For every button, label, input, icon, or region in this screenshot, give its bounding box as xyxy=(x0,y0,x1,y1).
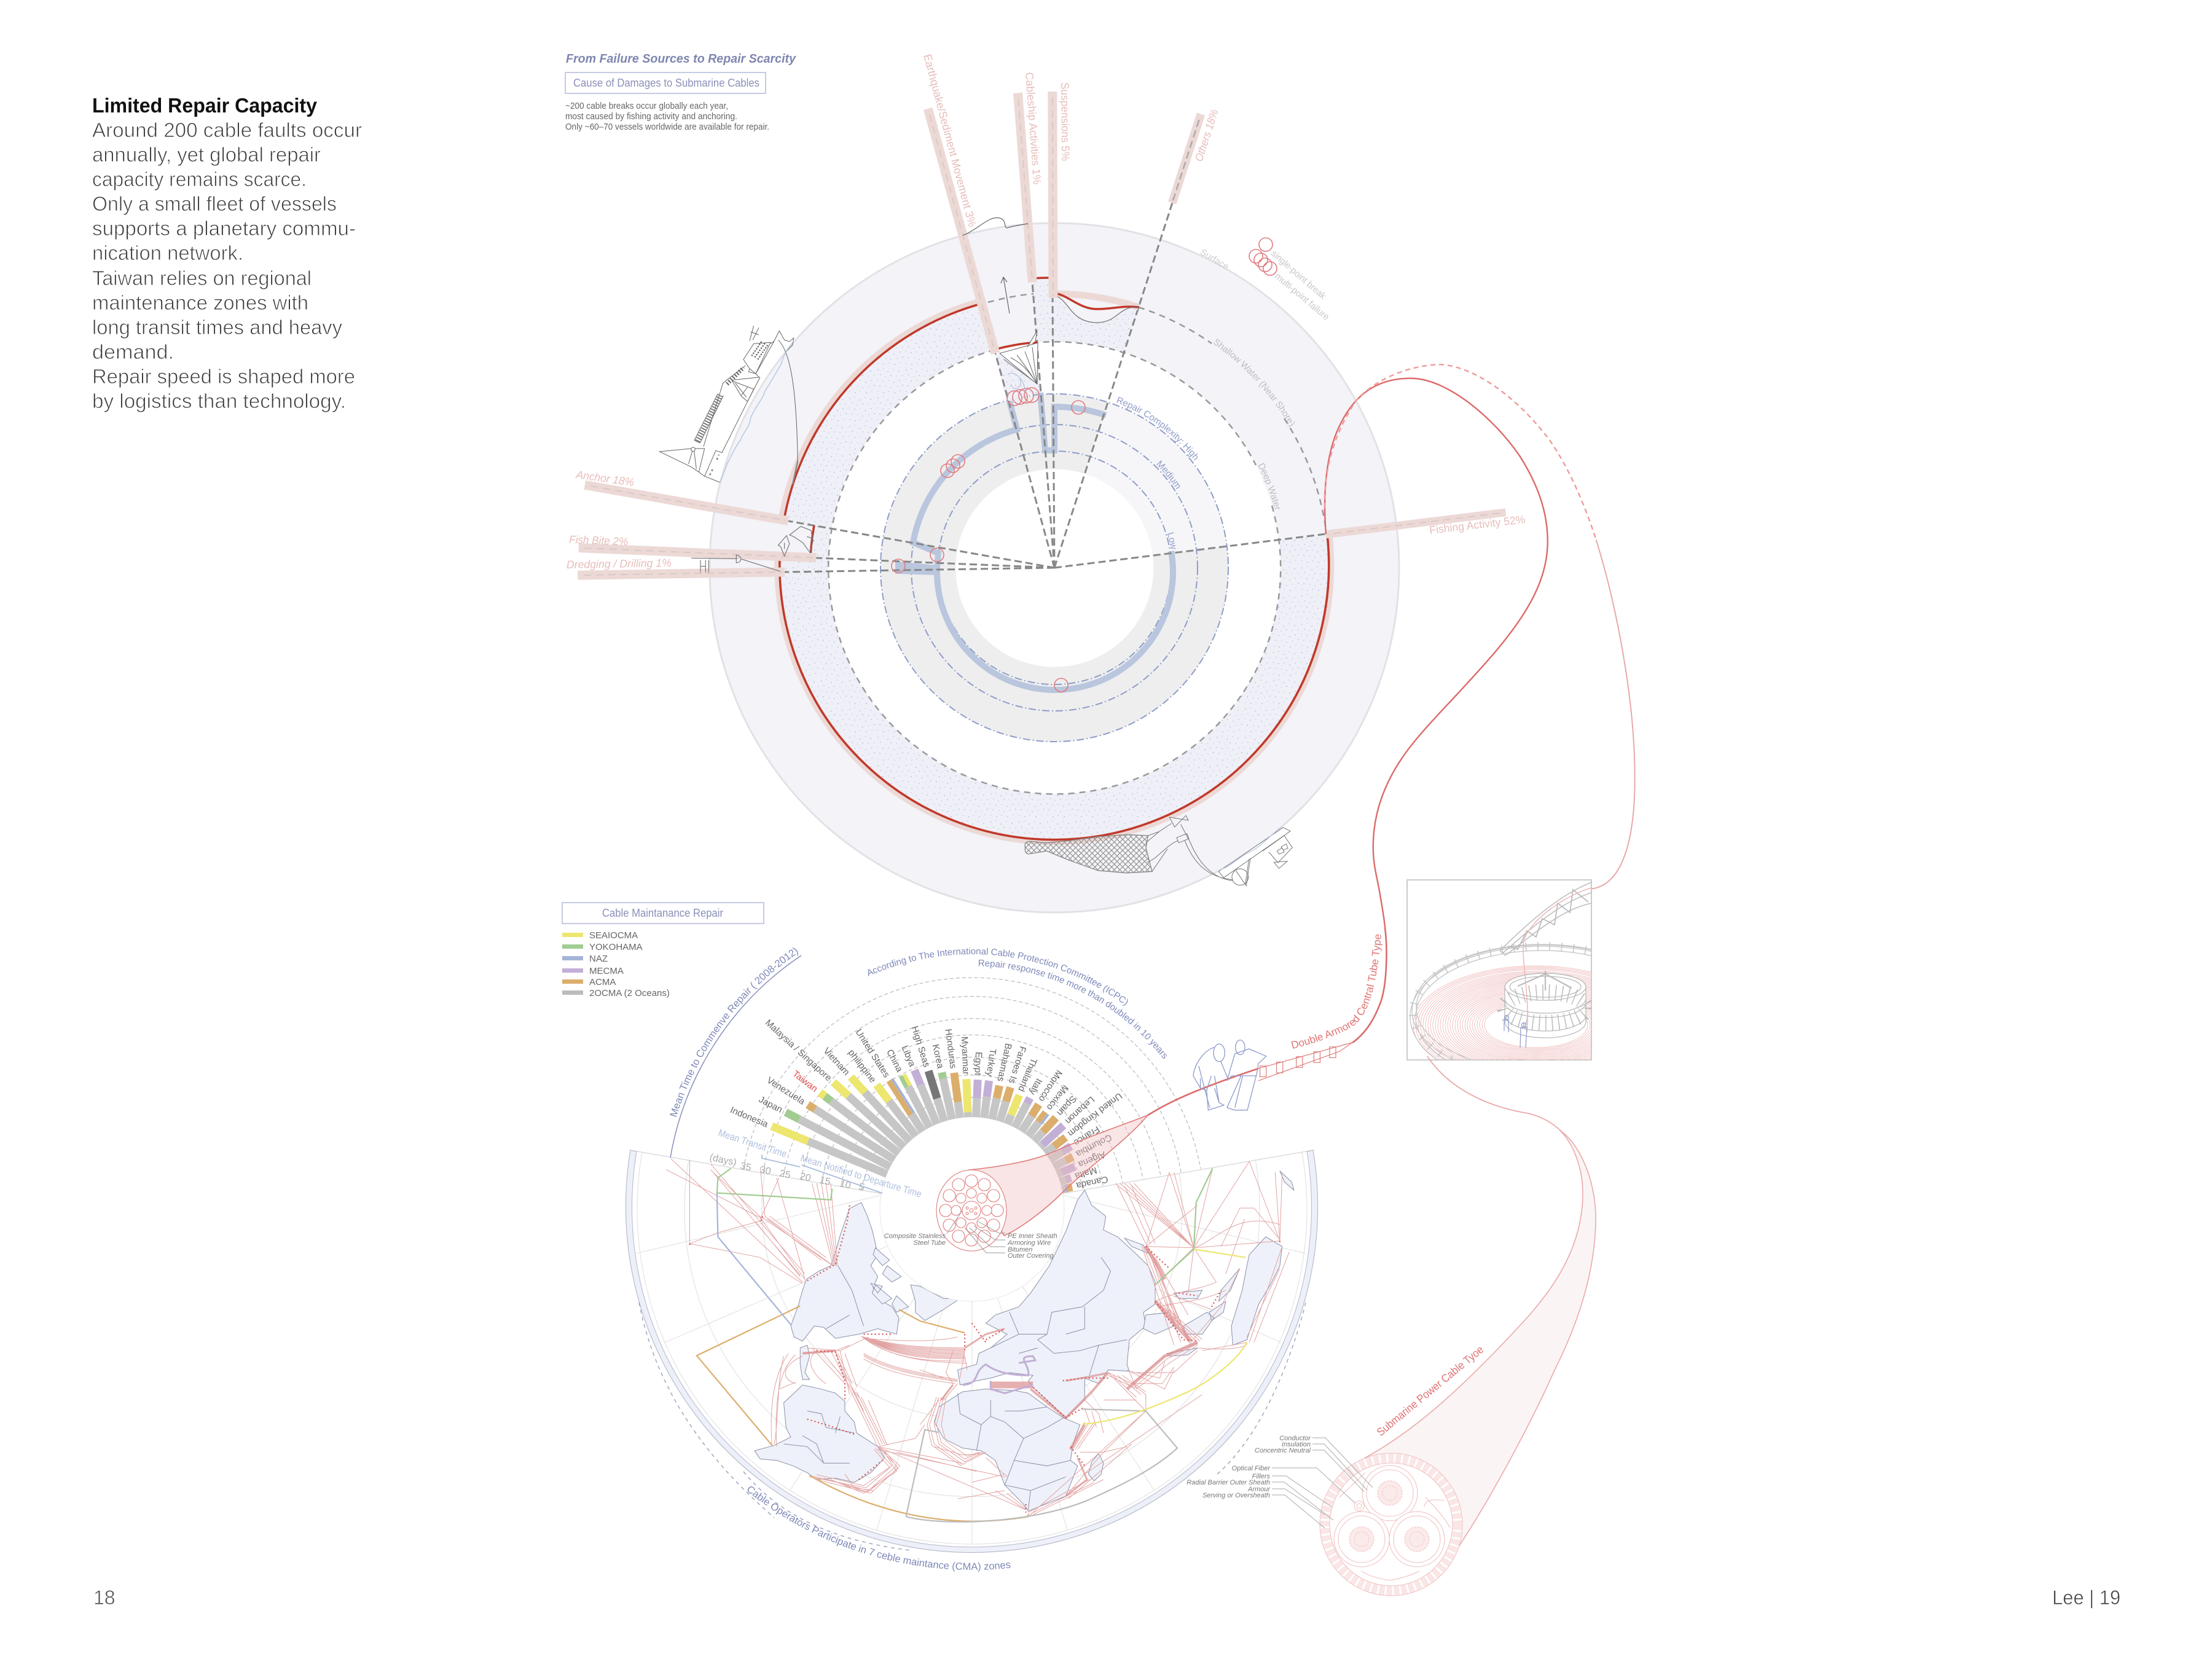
heading: Limited Repair Capacity xyxy=(92,94,318,117)
arc subtitle: response time: Repair response time more than doubled in 10 years xyxy=(978,960,1167,1059)
eurasia xyxy=(958,1190,1155,1418)
ring labels: Deep Water xyxy=(1258,463,1280,509)
bar: High Seas: High Seas xyxy=(909,1025,932,1069)
bar: United States xyxy=(853,1027,927,1134)
transit brackets xyxy=(762,1155,882,1193)
cross section labels: Armoring Wire xyxy=(1007,1239,1051,1247)
panel: world map of cables xyxy=(626,1150,1317,1553)
ring labels: Shallow Water (Near Shore) xyxy=(1214,339,1295,426)
bar: Malaysia / Singapore: Malaysia / Singapore xyxy=(763,1018,834,1083)
cable from box to power cable fan xyxy=(1427,1056,1564,1134)
spoke: fishing activity xyxy=(1325,508,1506,538)
bar: Mexico: Mexico xyxy=(1045,1083,1070,1112)
south america xyxy=(755,1385,885,1482)
madagascar xyxy=(1088,1454,1104,1481)
bar: Mexico xyxy=(1024,1083,1070,1139)
ring labels: Surface xyxy=(1198,247,1231,272)
day arcs xyxy=(743,978,1201,1190)
sediment wedge stipple xyxy=(995,343,1040,401)
bar: Spain: Spain xyxy=(1055,1094,1078,1118)
bar: Italy xyxy=(1010,1077,1044,1130)
bar: France xyxy=(1047,1124,1102,1164)
spoke labels: Earthquake/Sediment Movement 3% xyxy=(921,53,979,228)
body copy: by logistics than technology. xyxy=(92,390,346,412)
bar: Venezuela: Venezuela xyxy=(765,1075,807,1107)
cross section xyxy=(936,1170,1006,1251)
page number left: 18 xyxy=(93,1586,116,1609)
spoke: dredging xyxy=(578,567,785,580)
body copy: demand. xyxy=(92,340,174,363)
note text xyxy=(565,101,769,132)
greenland xyxy=(911,1285,960,1320)
convergence dashed lines xyxy=(785,203,1326,572)
cross section labels: Outer Covering xyxy=(1008,1252,1054,1260)
repair complexity labels: Low xyxy=(1167,532,1176,549)
bar: Indonesia xyxy=(729,1105,888,1179)
bar: Spain xyxy=(1030,1094,1078,1145)
cross section labels xyxy=(884,1210,1057,1260)
cross section labels: Composite Stainless xyxy=(884,1233,946,1240)
bar: Vietnam xyxy=(821,1046,914,1145)
bar: Faroes Is: Faroes Is xyxy=(1006,1045,1028,1084)
shallow water dashed arcs xyxy=(988,294,1327,535)
panel: equipment drawing xyxy=(1406,879,1592,1061)
repair complexity labels: Medium xyxy=(1156,460,1180,489)
text block: limited repair capacity xyxy=(92,94,362,412)
notch for fish bite xyxy=(780,520,814,557)
label: double armored: Double Armored Central Tube Type xyxy=(1292,934,1382,1049)
pale cable to equipment box xyxy=(1591,539,1635,889)
australia xyxy=(1231,1237,1282,1345)
label box: cause of damages xyxy=(565,73,766,93)
body copy: Repair speed is shaped more xyxy=(92,365,355,388)
southeast asia islands xyxy=(1124,1171,1294,1356)
power cable cross section xyxy=(1320,1453,1462,1596)
panel: armored cable section xyxy=(884,1040,1352,1260)
heading box: cable maintenance repair xyxy=(562,903,764,924)
bar: Thailand xyxy=(1002,1056,1039,1126)
bar: Turkey xyxy=(979,1048,998,1118)
legend: CMA zones: MECMA xyxy=(589,966,624,976)
bar: Egypt xyxy=(971,1051,984,1117)
spoke: earthquake xyxy=(924,108,1000,355)
bar: Malaysia / Singapore xyxy=(763,1018,908,1151)
cable from section to workers xyxy=(1148,1069,1258,1115)
legend: break types: single-point break xyxy=(1269,248,1328,302)
bar: philippine: philippine xyxy=(846,1048,878,1085)
spoke labels: Fishing Activity 52% xyxy=(1429,513,1526,536)
pink halo on cable xyxy=(778,294,1331,842)
africa xyxy=(934,1389,1080,1511)
spoke: cableship xyxy=(1013,93,1037,283)
spoke: suspensions xyxy=(1048,92,1057,298)
icon: fish and shark xyxy=(779,527,813,556)
repair complexity labels xyxy=(1116,397,1198,549)
power cable labels: Radial Barrier Outer Sheath xyxy=(1186,1479,1270,1486)
grid xyxy=(636,1152,1307,1544)
cross section labels: Steel Tube xyxy=(914,1239,946,1247)
dense cable bundles xyxy=(802,1247,1198,1496)
bar: United Kingdom xyxy=(1042,1091,1124,1157)
bar: Italy: Italy xyxy=(1027,1077,1044,1097)
bar: Algeria: Algeria xyxy=(1077,1149,1107,1170)
stippled shallow band xyxy=(780,304,1328,842)
bar: Korea: Korea xyxy=(930,1043,946,1070)
spoke labels: Suspensions 5% xyxy=(1059,82,1072,161)
bar: High Seas xyxy=(909,1025,949,1123)
break markers xyxy=(892,388,1085,692)
cable jacket and workers xyxy=(1193,1040,1352,1110)
seabed wave line xyxy=(1053,295,1139,323)
cable cone xyxy=(969,1115,1148,1236)
outer band xyxy=(626,1150,1317,1553)
spoke: fish bite xyxy=(578,543,817,562)
body copy: maintenance zones with xyxy=(92,291,308,314)
spoke labels: Anchor 18% xyxy=(575,468,635,488)
arctic islands xyxy=(871,1248,908,1312)
bar: philippine xyxy=(846,1048,920,1139)
day scale labels: 35 xyxy=(739,1161,752,1174)
body copy: nication network. xyxy=(92,241,243,264)
label box: cause of damages: Cause of Damages to Submarine Cables xyxy=(573,77,759,89)
cable routes xyxy=(666,1159,1289,1516)
white chart hole xyxy=(880,1117,1064,1301)
icon: trawl net xyxy=(1025,815,1292,886)
bar: Libya xyxy=(900,1044,941,1126)
bar: United Kingdom: United Kingdom xyxy=(1065,1091,1124,1139)
icon: dredging rig xyxy=(691,555,780,573)
north america xyxy=(791,1202,899,1341)
railing xyxy=(1409,942,1591,1060)
CMA zone outlines xyxy=(697,1168,1247,1522)
bar: Libya: Libya xyxy=(900,1044,917,1069)
armored cable segment xyxy=(1258,1043,1352,1081)
worker left xyxy=(1193,1044,1228,1110)
optical fiber core xyxy=(1354,1501,1364,1511)
day scale labels: (days) xyxy=(708,1152,737,1168)
power cable fan xyxy=(1365,1130,1596,1556)
core cable right xyxy=(1389,1512,1445,1567)
deep water dashed ring xyxy=(828,342,1281,794)
icon: cable ship xyxy=(659,326,798,484)
bar: Venezuela xyxy=(765,1075,897,1164)
small workers xyxy=(1502,1015,1527,1048)
legend: CMA zones: NAZ xyxy=(589,954,608,964)
bar: Bahamas xyxy=(987,1042,1014,1120)
note text: ~200 cable breaks occur globally each year, xyxy=(565,101,728,111)
bar: Bahamas: Bahamas xyxy=(995,1042,1014,1083)
dashed cable curve xyxy=(1325,364,1596,539)
body copy: capacity remains scarce. xyxy=(92,168,307,190)
legend: CMA zones: YOKOHAMA xyxy=(589,942,643,952)
red cable ring xyxy=(780,278,1329,840)
arch truss xyxy=(1500,882,1591,1032)
cross section labels: PE Inner Sheath xyxy=(1008,1233,1057,1240)
central drum xyxy=(1505,971,1586,1038)
bar: Korea xyxy=(930,1043,957,1121)
coastline speckle on outer ring xyxy=(639,1303,1306,1550)
day scale labels: 20 xyxy=(799,1171,812,1184)
bar: Columbia xyxy=(1051,1132,1113,1171)
bar: Egypt: Egypt xyxy=(972,1051,984,1076)
landmasses xyxy=(666,1159,1294,1522)
bar: Malta: Malta xyxy=(1073,1164,1098,1182)
legend: CMA zones: 2OCMA (2 Oceans) xyxy=(589,988,670,998)
icon: upward arrow xyxy=(1001,277,1010,313)
spoke: anchor xyxy=(584,480,789,525)
bar: France: France xyxy=(1072,1124,1102,1148)
power cable labels xyxy=(1186,1435,1373,1528)
power cable labels: Concentric Neutral xyxy=(1255,1447,1311,1454)
legend: CMA zones: ACMA xyxy=(589,977,616,987)
worker right xyxy=(1227,1040,1266,1110)
spoke labels: Cableship Activities 1% xyxy=(1023,72,1043,185)
spoke labels: Fish Bite 2% xyxy=(569,533,628,547)
heading box: cable maintenance repair: Cable Maintanance Repair xyxy=(602,907,723,919)
day scale labels: 30 xyxy=(759,1164,772,1177)
bar: Taiwan xyxy=(790,1069,902,1158)
bar: China: China xyxy=(884,1048,905,1074)
day scale labels: 10 xyxy=(839,1179,852,1191)
bar: Turkey: Turkey xyxy=(984,1048,998,1077)
arc title: mean time: Mean Time to Commenve Repair ( 2008-2012) xyxy=(670,947,798,1117)
map sector background xyxy=(626,1150,1317,1553)
bar: Thailand: Thailand xyxy=(1016,1056,1039,1093)
day scale labels: 15 xyxy=(818,1175,831,1188)
spoke labels xyxy=(567,53,1526,571)
body copy xyxy=(92,119,362,412)
repair complexity rings xyxy=(880,394,1228,742)
ring labels xyxy=(1198,247,1295,509)
bar: Malta xyxy=(1058,1164,1098,1186)
bar: Honduras xyxy=(943,1028,965,1118)
label: mean transit time: Mean Transit Time xyxy=(717,1128,788,1160)
body copy: Only a small fleet of vessels xyxy=(92,192,337,215)
legend: break types xyxy=(1249,238,1332,323)
bar: Lebanon xyxy=(1037,1094,1097,1151)
legend: CMA zones xyxy=(562,930,670,998)
repair complexity labels: Repair Complexity: High xyxy=(1116,397,1198,461)
solid cable curve xyxy=(1325,378,1548,928)
spoke labels: Dredging / Drilling 1% xyxy=(567,557,672,571)
cable landing points xyxy=(689,1206,1280,1513)
country bars xyxy=(729,1018,1124,1194)
day scale labels xyxy=(708,1152,866,1193)
central america xyxy=(800,1345,810,1379)
red cable: lower run xyxy=(1352,928,1386,1043)
bar: Canada xyxy=(1061,1174,1109,1194)
arc title: ICPC: According to The International Cable Protection Committee (ICPC) xyxy=(868,947,1128,1006)
day scale labels: 5 xyxy=(858,1182,866,1193)
spoke labels: Others 18% xyxy=(1193,108,1221,163)
body copy: Around 200 cable faults occur xyxy=(92,119,362,141)
note text: most caused by fishing activity and anchoring. xyxy=(565,111,737,122)
panel: ocean depth ring diagram xyxy=(567,53,1551,938)
bar: Canada: Canada xyxy=(1075,1174,1109,1191)
label: submarine power cable: Submarine Power Cable Tyoe xyxy=(1375,1343,1486,1438)
bar: Myanmar xyxy=(959,1036,973,1118)
power cable labels: Serving or Oversheath xyxy=(1202,1492,1270,1499)
legend: break types: multi-point failure xyxy=(1273,271,1332,323)
bar: Faroes Is xyxy=(995,1045,1028,1123)
power cable labels: Fillers xyxy=(1252,1473,1270,1480)
page number right: Lee | 19 xyxy=(2052,1586,2120,1609)
icon: seabed hill line xyxy=(963,218,1028,235)
bar: Algeria xyxy=(1055,1149,1107,1179)
core cable left xyxy=(1334,1512,1389,1567)
legend: CMA zones: SEAIOCMA xyxy=(589,930,638,941)
outer surface disc xyxy=(710,223,1399,912)
power cable labels: Conductor xyxy=(1279,1435,1311,1442)
bar: Japan xyxy=(757,1094,893,1172)
country borders xyxy=(784,1257,1127,1510)
bar: Taiwan: Taiwan xyxy=(790,1069,820,1094)
icon: sediment wedge drawing xyxy=(1000,331,1038,393)
deep water white disc xyxy=(828,342,1281,794)
note text: Only ~60–70 vessels worldwide are available for repair. xyxy=(565,122,769,132)
bar: Myanmar: Myanmar xyxy=(959,1036,971,1075)
body copy: Taiwan relies on regional xyxy=(92,267,312,289)
panel: radial bar chart of repair time xyxy=(670,947,1225,1572)
core cable top xyxy=(1362,1465,1418,1521)
body copy: long transit times and heavy xyxy=(92,316,342,339)
bar: Japan: Japan xyxy=(757,1094,784,1115)
bar: Morocco xyxy=(1017,1068,1064,1134)
coils of cable xyxy=(1413,966,1591,1060)
bar: Morocco: Morocco xyxy=(1037,1068,1064,1104)
repair path xyxy=(898,393,1173,690)
bar: Indonesia: Indonesia xyxy=(729,1105,770,1130)
body copy: annually, yet global repair xyxy=(92,143,321,166)
mean time arc xyxy=(670,955,801,1158)
red cable: solid loop xyxy=(1325,364,1635,928)
bar: Vietnam: Vietnam xyxy=(821,1046,852,1078)
bar: Columbia: Columbia xyxy=(1074,1132,1113,1159)
power cable labels: Optical Fiber xyxy=(1232,1465,1271,1472)
label: mean notified: Mean Notified to Departure Time xyxy=(799,1153,923,1200)
bar: United States: United States xyxy=(853,1027,892,1080)
cross section labels: Bitumen xyxy=(1008,1246,1032,1253)
power cable labels: Armour xyxy=(1247,1486,1271,1493)
heading: from failure sources: From Failure Sources to Repair Scarcity xyxy=(566,52,796,66)
power cable labels: Insulation xyxy=(1282,1441,1311,1448)
day scale labels: 25 xyxy=(779,1168,791,1181)
bar: Lebanon: Lebanon xyxy=(1063,1094,1097,1126)
arc title: CMA zones: Cable Operators Participate in 7 ceble maintance (CMA) zones xyxy=(747,1486,1010,1572)
body copy: supports a planetary commu- xyxy=(92,217,356,240)
bar: Honduras: Honduras xyxy=(943,1028,959,1069)
stippled top wedges xyxy=(1032,278,1054,342)
bar: China xyxy=(884,1048,934,1130)
spoke: others xyxy=(1168,112,1205,204)
